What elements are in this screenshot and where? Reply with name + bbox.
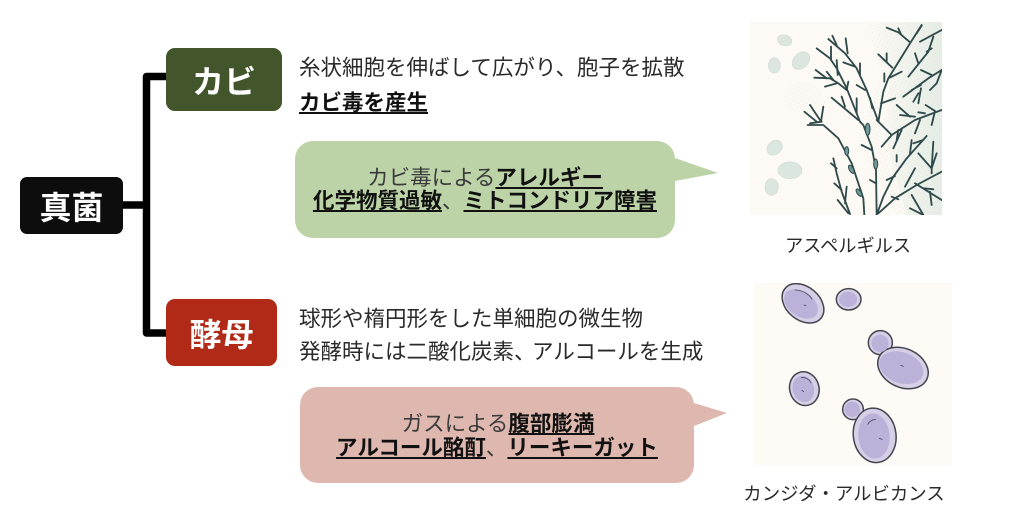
caption: candida albicans: カンジダ・アルビカンス [743,483,945,504]
mold description [299,56,684,115]
illustration: aspergillus [750,22,942,215]
mold description: カビ毒を産生 [299,91,428,115]
caption: aspergillus: アスペルギルス [785,236,911,256]
callout: yeast health effects: ガスによる腹部膨満 [402,412,594,436]
category node: 酵母: 酵母 [189,316,254,352]
yeast description: 発酵時には二酸化炭素、アルコールを生成 [299,340,703,364]
illustration: candida albicans [754,283,952,465]
root node: 真菌: 真菌 [39,190,104,226]
yeast description: 球形や楕円形をした単細胞の微生物 [299,307,643,331]
yeast description [299,307,703,364]
callout: mold health effects: 化学物質過敏、ミトコンドリア障害 [313,189,657,213]
mold description: 糸状細胞を伸ばして広がり、胞子を拡散 [299,56,684,80]
category node: カビ [166,48,282,111]
callout: mold health effects [295,141,718,238]
root node: 真菌 [20,177,123,234]
callout: yeast health effects: アルコール酩酊、リーキーガット [336,436,658,460]
category node: 酵母 [166,299,277,366]
callout: mold health effects: カビ毒によるアレルギー [367,166,603,190]
callout: yeast health effects [300,387,727,483]
category node: カビ: カビ [192,64,256,100]
